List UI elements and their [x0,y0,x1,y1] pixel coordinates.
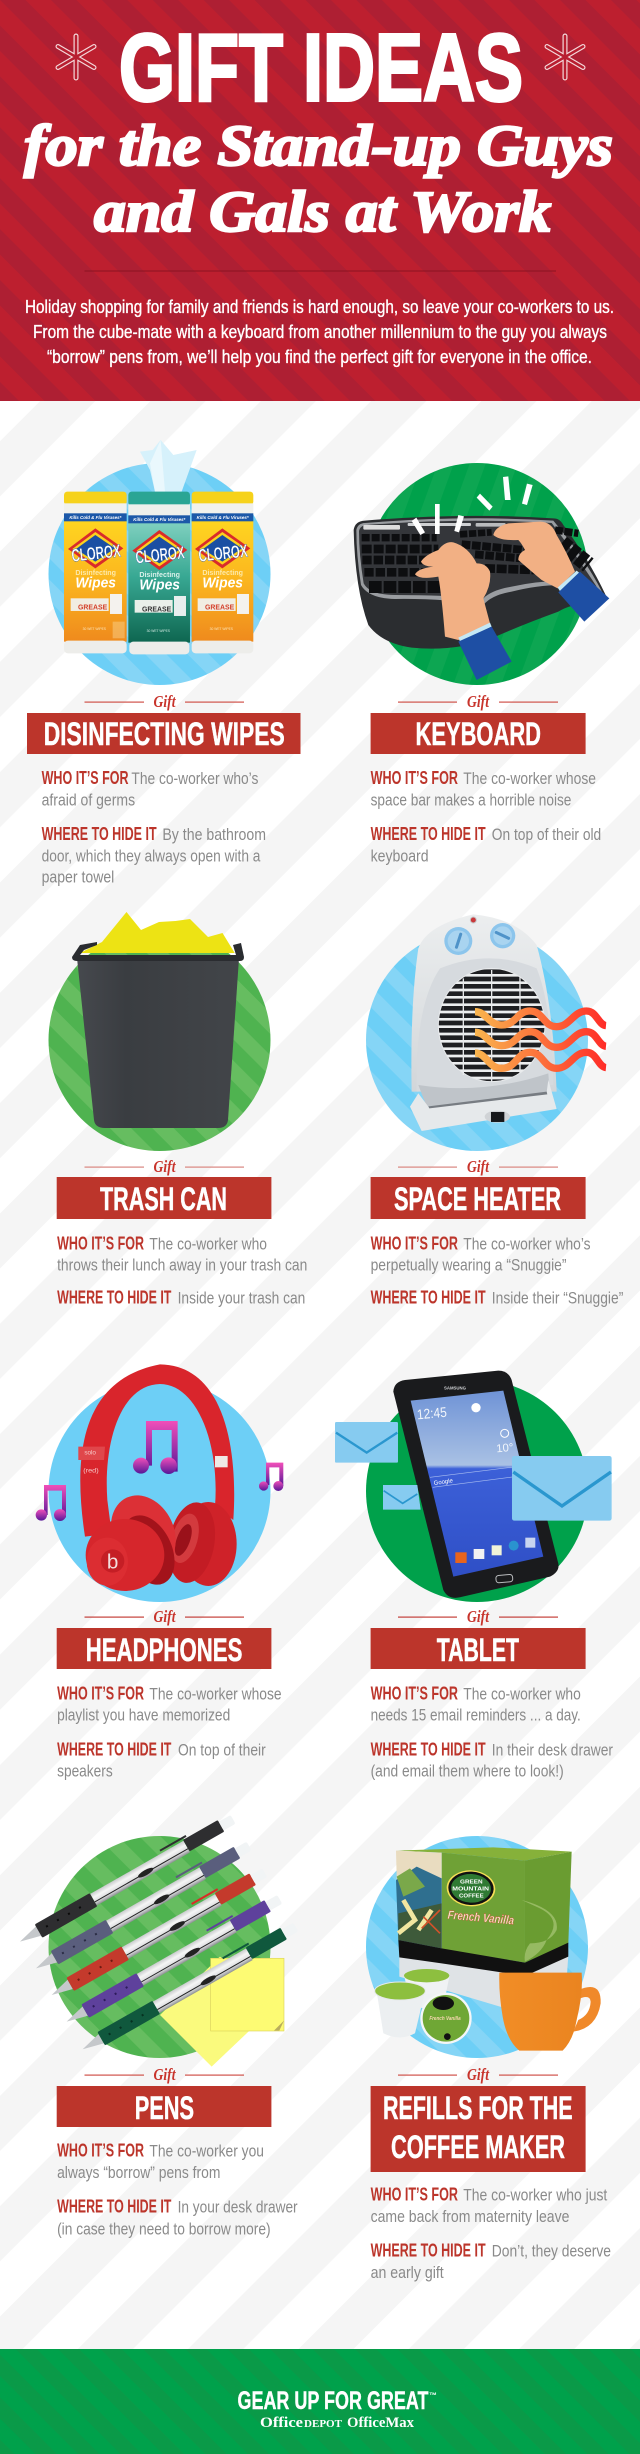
text: where to hide it: WHERE TO HIDE IT [57,1288,171,1308]
text: who it's for: The co-worker who’s [131,769,258,788]
text: who it's for: WHO IT’S FOR [371,1684,458,1704]
illustration: clorox wipes on blue circle: Wipes [202,575,243,591]
text: who it's for: space bar makes a horrible noise [371,790,571,810]
footer banner [0,2349,640,2454]
gift divider: Gift [154,2065,177,2084]
title bar: trash can: TRASH CAN [100,1181,227,1217]
title bar: trash can [57,1177,271,1219]
trademark symbol: ™ [429,2391,437,2400]
footer tagline: GEAR UP FOR GREAT [238,2387,428,2415]
panel: tablet [335,1371,613,1780]
text: where to hide it: On top of their old [492,825,601,844]
text: who it's for [42,768,258,810]
text: where to hide it [371,1288,624,1308]
text: who it's for: afraid of germs [42,790,135,810]
page background stripes [0,400,640,2349]
text: where to hide it: In your desk drawer [178,2198,298,2216]
illustration: five pens and sticky notes on green circle [15,1811,300,2067]
text: who it's for: The co-worker whose [463,769,596,788]
text: where to hide it: WHERE TO HIDE IT [57,2196,171,2216]
text: who it's for: playlist you have memorized [57,1706,230,1724]
text: where to hide it: WHERE TO HIDE IT [371,1740,486,1760]
title bar: disinfecting wipes [27,713,300,754]
text: who it's for: WHO IT’S FOR [57,1684,144,1704]
illustration: clorox wipes on blue circle: Kills Cold & Flu Viruses* [69,515,122,520]
text: where to hide it: an early gift [371,2263,444,2282]
illustration: tablet and envelopes on green circle: SAMSUNG [444,1385,466,1390]
illustration: coffee pod box, pods and mug on blue circle: COFFEE [459,1894,484,1900]
illustration: trash can on green circle [48,912,270,1151]
illustration: clorox wipes on blue circle: Wipes [139,577,180,593]
illustration: coffee pod box, pods and mug on blue circle: French Vanilla [447,1908,515,1927]
text: who it's for: The co-worker who’s [463,1234,591,1254]
illustration: clorox wipes on blue circle: GREASE [142,604,171,613]
illustration: clorox wipes on blue circle: 30 WET WIPES [147,628,170,633]
text: who it's for: The co-worker who just [463,2186,608,2204]
illustration: clorox wipes on blue circle: GREASE [205,602,234,611]
gift divider: Gift [467,1607,490,1626]
text: where to hide it: (in case they need to borrow more) [57,2220,271,2238]
illustration: clorox wipes on blue circle: GREASE [78,602,107,611]
illustration: coffee pod box, pods and mug on blue circle: GREEN [460,1879,483,1885]
icon: right snowflake [547,36,583,78]
illustration: space heater on blue circle [366,914,606,1151]
footer logos: Office [260,2415,303,2431]
text: where to hide it: By the bathroom [162,825,266,844]
illustration: red headphones and music notes on blue circle: b [107,1551,118,1574]
title bar: keyboard [371,713,586,754]
text: who it's for: The co-worker who [463,1684,581,1704]
text: where to hide it: In their desk drawer [492,1740,613,1760]
illustration: coffee pod box, pods and mug on blue circle [366,1836,601,2058]
panel: space heater [366,914,624,1308]
panel: pens [15,1811,300,2238]
illustration: clorox wipes on blue circle: Kills Cold & Flu Viruses* [197,515,249,520]
text: where to hide it: Inside your trash can [178,1288,305,1308]
title bar: disinfecting wipes: DISINFECTING WIPES [44,716,285,752]
illustration: tablet and envelopes on green circle: Google [433,1478,454,1487]
title bar: headphones: HEADPHONES [86,1632,242,1668]
text: who it's for: came back from maternity leave [371,2207,569,2226]
title bar: refills for the coffee maker: COFFEE MAKER [391,2129,565,2165]
text: who it's for: WHO IT’S FOR [57,1234,144,1254]
text: where to hide it: WHERE TO HIDE IT [371,2240,486,2260]
k-cups [406,1978,446,2008]
title bar: tablet [371,1628,586,1669]
title bar: space heater: SPACE HEATER [394,1181,561,1217]
text: who it's for [371,1234,591,1274]
subtitle line two: and Gals at Work [94,179,551,244]
text: where to hide it: speakers [57,1762,113,1780]
text: where to hide it [371,2240,611,2282]
illustration: tablet and envelopes on green circle: 10° [496,1442,514,1455]
gift divider: Gift [467,692,490,711]
text: where to hide it [371,1740,613,1780]
text: where to hide it [57,1288,305,1308]
text: who it's for: WHO IT’S FOR [371,1234,458,1254]
illustration: red headphones and music notes on blue circle: (red) [83,1469,99,1475]
illustration: red headphones and music notes on blue circle [36,1364,283,1602]
illustration: keyboard and typing hands on green circle [354,463,609,685]
text: who it's for [57,2140,264,2182]
intro paragraph [25,297,614,367]
illustration: clorox wipes on blue circle: Wipes [75,575,116,591]
illustration: clorox wipes on blue circle: CLOROX [134,542,186,567]
text: where to hide it: (and email them where to look!) [371,1762,564,1780]
mug [573,1987,601,2032]
text: who it's for: The co-worker whose [149,1684,282,1704]
illustration: coffee pod box, pods and mug on blue circle: MOUNTAIN [452,1887,489,1893]
illustration: clorox wipes on blue circle: CLOROX [197,541,249,566]
gift divider: Gift [154,692,177,711]
text: who it's for [57,1234,307,1274]
text: who it's for [371,768,596,810]
header banner [0,0,640,401]
text: where to hide it: door, which they always open with a [42,846,261,866]
text: who it's for: always “borrow” pens from [57,2163,220,2182]
text: where to hide it: WHERE TO HIDE IT [371,824,486,844]
title bar: headphones [57,1628,271,1669]
text: who it's for [371,2184,608,2226]
panel: trash can [48,912,307,1308]
text: where to hide it: WHERE TO HIDE IT [57,1740,171,1760]
text: where to hide it: paper towel [42,868,114,886]
title bar: space heater [371,1177,586,1219]
illustration: clorox wipes on blue circle: 30 WET WIPES [83,626,106,631]
footer logos: OfficeMax [347,2415,414,2431]
text: who it's for: perpetually wearing a “Snuggie” [371,1256,567,1274]
panel: coffee refills [366,1836,611,2282]
title bar: pens [57,2086,271,2127]
illustration: clorox wipes on blue circle [48,440,270,685]
panel: headphones [36,1364,283,1780]
hands [415,542,490,640]
text: who it's for: WHO IT’S FOR [371,768,458,788]
title bar: keyboard: KEYBOARD [416,716,541,752]
illustration: clorox wipes on blue circle: CLOROX [70,541,122,566]
title bar: pens: PENS [135,2090,194,2126]
text: where to hide it: keyboard [371,846,429,866]
footer logos: DEPOT [304,2419,342,2430]
title bar: tablet: TABLET [437,1632,519,1668]
icon: left snowflake [58,36,94,78]
subtitle line one: for the Stand-up Guys [24,113,613,178]
text: who it's for: needs 15 email reminders ... a day. [371,1706,581,1724]
gift divider: Gift [467,2065,490,2084]
text: who it's for: WHO IT’S FOR [371,2184,458,2204]
footer logos [260,2415,414,2431]
text: who it's for [57,1684,282,1724]
title bar: refills for the coffee maker [371,2086,586,2172]
gift divider: Gift [154,1607,177,1626]
illustration: clorox wipes on blue circle: Disinfecting [202,568,243,577]
text: where to hide it: WHERE TO HIDE IT [371,1288,486,1308]
gift divider: Gift [154,1157,177,1176]
illustration: tablet and envelopes on green circle [335,1371,612,1602]
text: where to hide it: On top of their [178,1740,266,1760]
text: where to hide it [371,824,601,866]
text: who it's for: The co-worker who [149,1234,267,1254]
text: where to hide it [57,2196,298,2238]
text: who it's for [371,1684,581,1724]
text: where to hide it [57,1740,266,1780]
gift divider: Gift [467,1157,490,1176]
text: where to hide it [42,824,266,886]
illustration: clorox wipes on blue circle: Disinfecting [139,570,180,579]
illustration: coffee pod box, pods and mug on blue circle: French Vanilla [429,2016,461,2022]
text: who it's for: throws their lunch away in your trash can [57,1256,307,1274]
text: where to hide it: WHERE TO HIDE IT [42,824,157,844]
illustration: clorox wipes on blue circle: Disinfecting [75,568,116,577]
illustration: tablet and envelopes on green circle: 12:45 [416,1404,448,1422]
text: where to hide it: Don’t, they deserve [492,2242,611,2260]
illustration: clorox wipes on blue circle: Kills Cold & Flu Viruses* [133,517,186,522]
panel: disinfecting wipes [27,440,300,886]
illustration: red headphones and music notes on blue circle: solo [84,1450,96,1457]
text: who it's for: The co-worker you [149,2142,264,2160]
panel: keyboard [354,463,609,866]
text: who it's for: WHO IT’S FOR [57,2140,144,2160]
text: who it's for: WHO IT’S FOR [42,768,129,788]
illustration: clorox wipes on blue circle: 30 WET WIPES [210,626,233,631]
